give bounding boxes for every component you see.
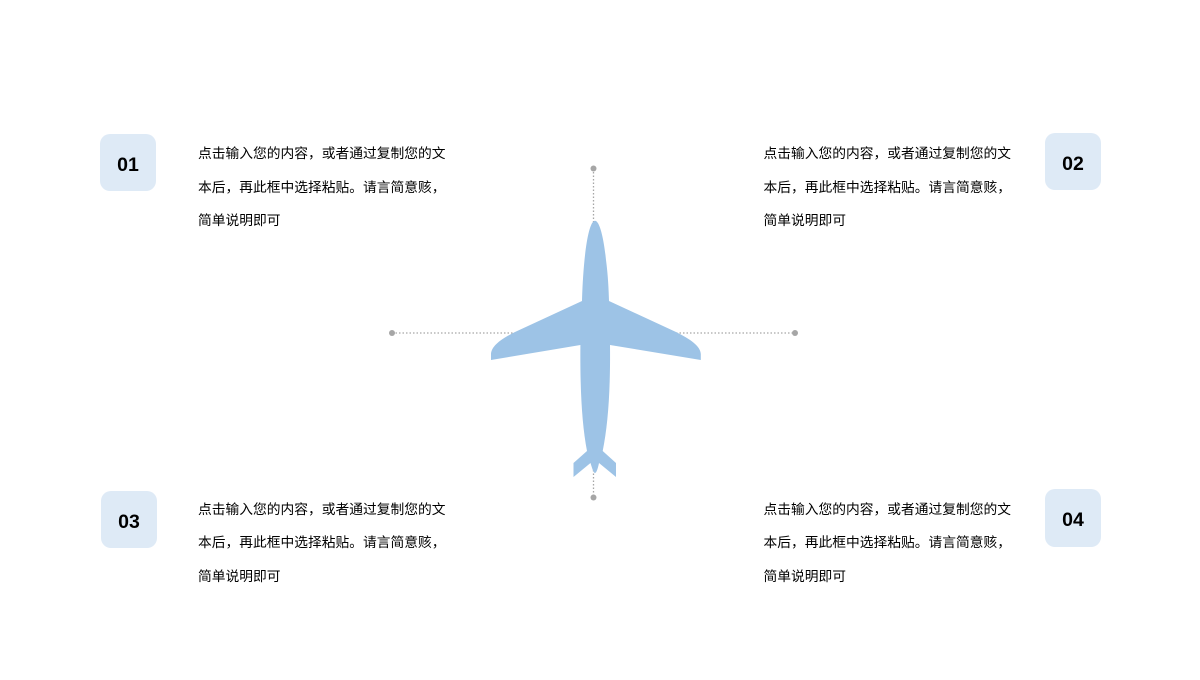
- badge 03: [101, 491, 157, 548]
- text block 2: 简单说明即可: [764, 213, 846, 228]
- guide line: right: [676, 330, 798, 336]
- text block 4: 简单说明即可: [764, 568, 846, 584]
- text block 2: 本后，再此框中选择粘贴。请言简意赅，: [764, 180, 1011, 194]
- badge 01: [100, 134, 156, 191]
- badge 04: 04: [1062, 509, 1084, 531]
- text block 2: [764, 146, 1011, 228]
- text block 1: 简单说明即可: [198, 213, 281, 228]
- text block 3: 简单说明即可: [198, 568, 281, 584]
- text block 1: 本后，再此框中选择粘贴。请言简意赅，: [198, 180, 446, 194]
- badge 01: 01: [117, 154, 139, 176]
- text block 3: 本后，再此框中选择粘贴。请言简意赅，: [198, 535, 446, 550]
- badge 04: [1045, 489, 1101, 547]
- icon: airplane: [491, 221, 701, 477]
- badge 03: 03: [118, 511, 140, 533]
- text block 4: [764, 502, 1011, 584]
- guide line: bottom: [590, 470, 596, 500]
- badge 02: [1045, 133, 1101, 190]
- text block 4: 本后，再此框中选择粘贴。请言简意赅，: [764, 535, 1011, 550]
- guide line: left: [389, 330, 516, 336]
- text block 2: 点击输入您的内容，或者通过复制您的文: [764, 146, 1011, 161]
- badge 02: 02: [1062, 153, 1084, 175]
- guide line: top: [590, 166, 596, 222]
- text block 3: 点击输入您的内容，或者通过复制您的文: [198, 502, 446, 516]
- text block 3: [198, 502, 446, 584]
- text block 1: 点击输入您的内容，或者通过复制您的文: [198, 146, 446, 161]
- text block 1: [198, 146, 446, 228]
- text block 4: 点击输入您的内容，或者通过复制您的文: [764, 502, 1011, 516]
